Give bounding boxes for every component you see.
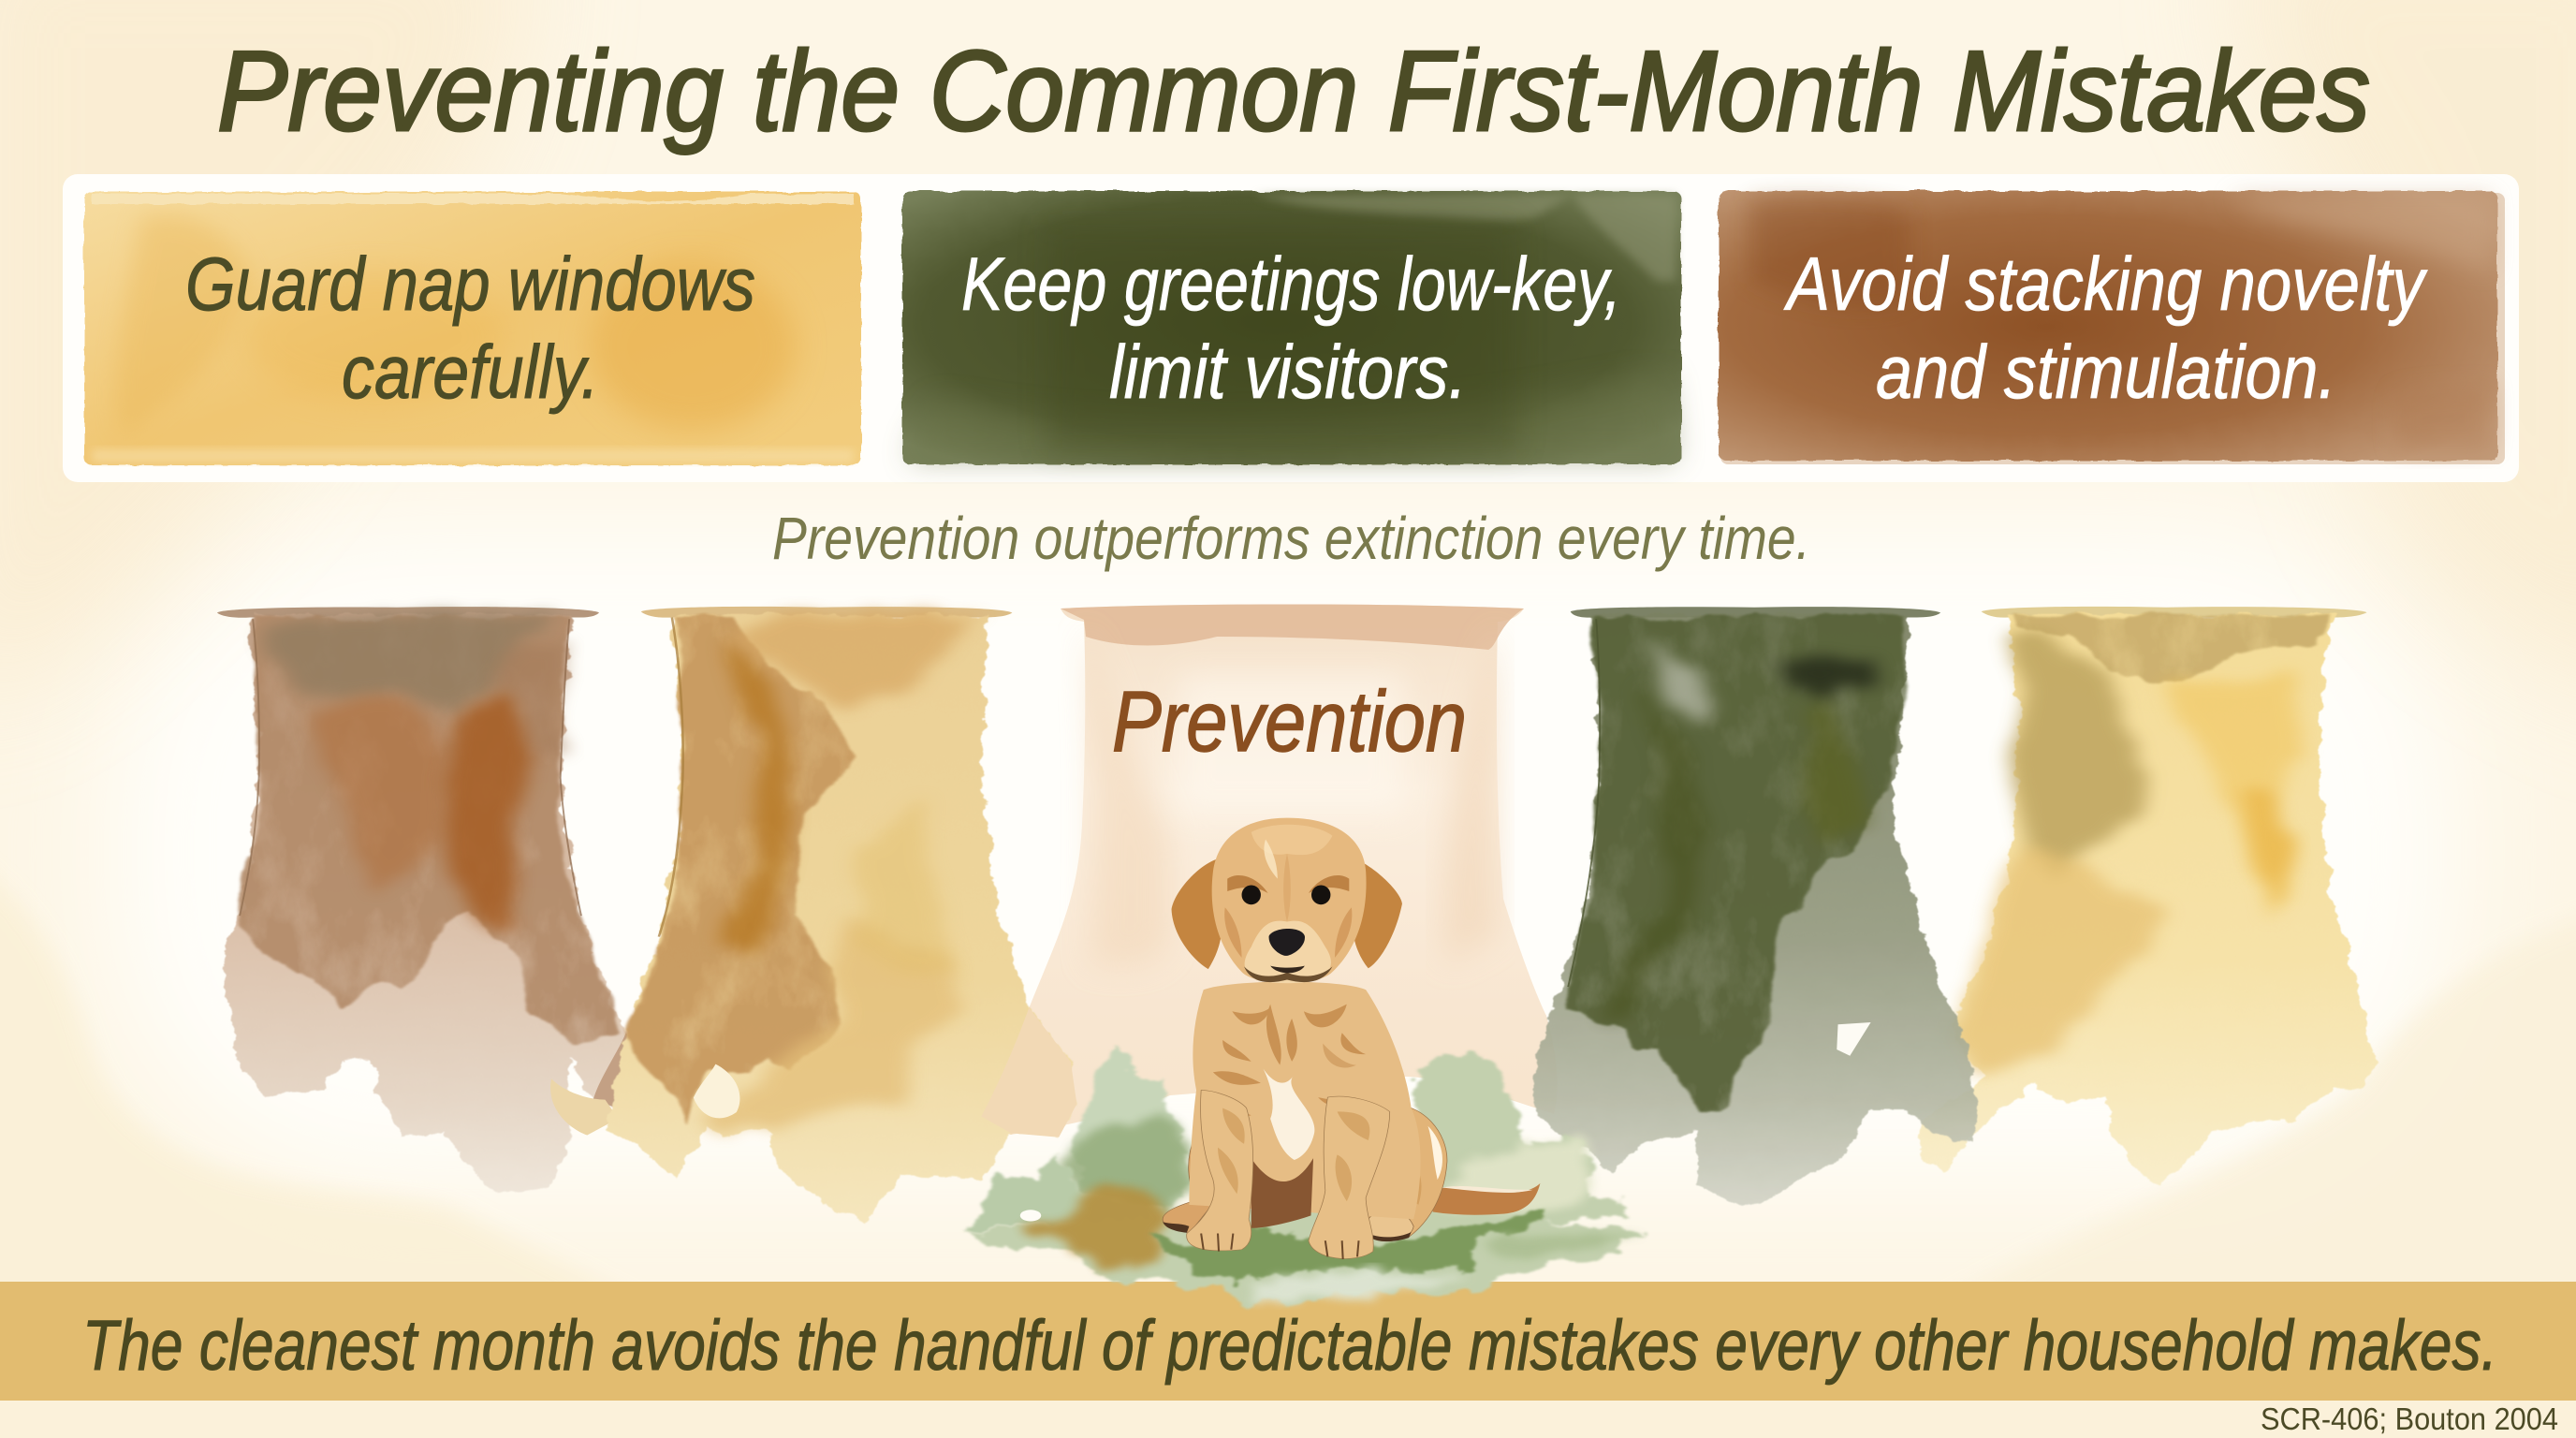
front right leg [1309,1096,1390,1258]
body [1189,982,1421,1219]
front left leg [1187,1090,1253,1251]
card: greetings: Keep greetings low-key, [961,242,1621,327]
nose [1269,929,1305,956]
card: novelty: and stimulation. [1876,330,2336,415]
card: nap windows [84,192,861,465]
curtain 5: pale gold [1922,607,2376,1187]
curtain 2: tan [605,607,1076,1221]
head [1212,818,1367,983]
icon: golden retriever puppy [1163,818,1540,1259]
card: novelty: Avoid stacking novelty [1784,242,2428,327]
ears [1172,858,1402,969]
mouth [1244,966,1332,982]
leg shading [1218,1108,1369,1201]
Prevention label: Prevention [1112,674,1467,770]
grass patch [965,1048,1647,1305]
curtains row [217,605,2376,1221]
haunches [1163,1105,1447,1241]
card: novelty [1719,191,2505,464]
panel: mistake cards [63,174,2519,482]
fur markings [1213,1005,1368,1117]
card: nap windows: Guard nap windows [185,242,755,327]
subtitle: Prevention outperforms extinction every time. [772,505,1810,572]
white chest [1263,1068,1314,1160]
card: greetings: limit visitors. [1109,330,1467,415]
card: nap windows: carefully. [342,330,599,415]
card: greetings [902,191,1681,464]
white card backing [63,174,2519,482]
paw lines [1201,1234,1359,1259]
bottom banner [0,1282,2576,1401]
curtain 4: olive [1533,607,1977,1204]
muzzle [1245,921,1331,983]
curtain 3: peach, with Prevention label [972,605,1558,1135]
head shading [1224,825,1352,958]
tail [1433,1183,1540,1215]
source note: SCR-406; Bouton 2004 [2261,1401,2558,1436]
curtain 1: brown [217,607,686,1192]
belly shadow [1251,1158,1313,1228]
eyes [1242,886,1330,904]
title: Preventing the Common First-Month Mistakes [217,27,2370,154]
